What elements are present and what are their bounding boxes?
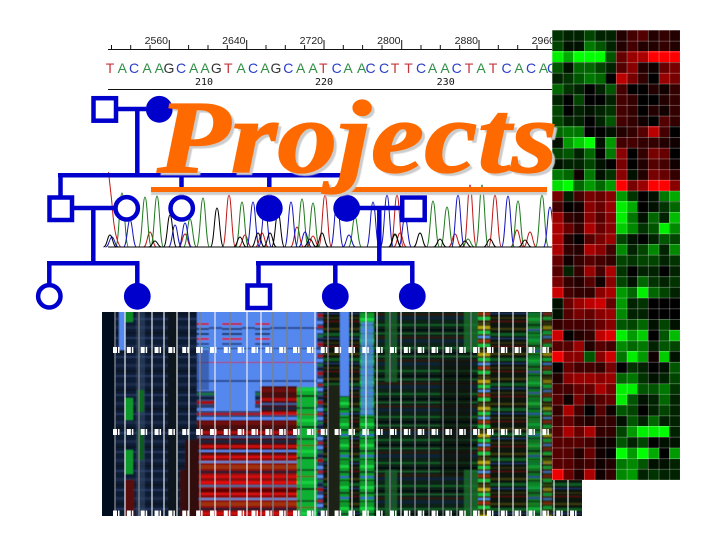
base position numbers [195,77,455,88]
ruler: position scale: 2880 [455,35,478,47]
base call sequence: A [539,60,549,76]
base call sequence: A [142,60,152,76]
base call sequence: T [391,60,400,76]
ruler: position scale [108,35,555,50]
base call sequence: A [260,60,270,76]
base call sequence: A [440,60,450,76]
base call sequence: C [379,60,389,76]
title: Projects [157,80,558,195]
base call sequence: A [189,60,199,76]
base call sequence: C [501,60,512,76]
base call sequence: C [283,60,293,76]
base call sequence: C [416,60,426,76]
base call sequence: A [296,60,306,76]
pedigree chart [38,96,426,310]
base call sequence: T [404,60,413,76]
base call sequence: A [118,60,128,76]
base call sequence: C [526,60,536,76]
gel expression image [100,310,584,518]
ruler: position scale: 2960 [532,35,555,47]
base position numbers: 210 [195,77,213,88]
ruler: position scale: 2800 [377,35,401,47]
base call sequence: A [200,60,210,76]
base call sequence: T [106,60,115,76]
base call sequence: A [476,60,486,76]
base call sequence: A [357,60,367,76]
base call sequence: A [308,60,318,76]
heatmap [552,30,680,480]
base call sequence: C [547,60,557,76]
base call sequence: C [176,60,186,76]
base call sequence: T [489,60,498,76]
base call sequence: A [428,60,438,76]
ruler: position scale: 2720 [300,35,323,47]
ruler: position scale: 2640 [222,35,246,47]
base position numbers: 230 [437,77,455,88]
base call sequence: A [514,60,524,76]
base call sequence: A [236,60,246,76]
base call sequence: C [365,60,376,76]
base call sequence: G [271,60,281,76]
sequencing and pedigree artwork [36,37,582,516]
base call sequence: T [465,60,474,76]
base call sequence: C [332,60,342,76]
base position numbers: 220 [315,77,333,88]
base call sequence: A [343,60,353,76]
ruler: position scale: 2560 [145,35,168,47]
base call sequence: A [155,60,165,76]
chromatogram traces [104,172,556,247]
base call sequence: G [164,60,174,76]
base call sequence: T [224,60,233,76]
base call sequence: C [248,60,258,76]
pedigree connecting lines [47,109,414,284]
title underline bar [151,187,547,192]
base call sequence: C [129,60,139,76]
pedigree individuals [38,96,426,310]
base call sequence: T [319,60,328,76]
base call sequence: C [452,60,462,76]
base call sequence: G [211,60,222,76]
